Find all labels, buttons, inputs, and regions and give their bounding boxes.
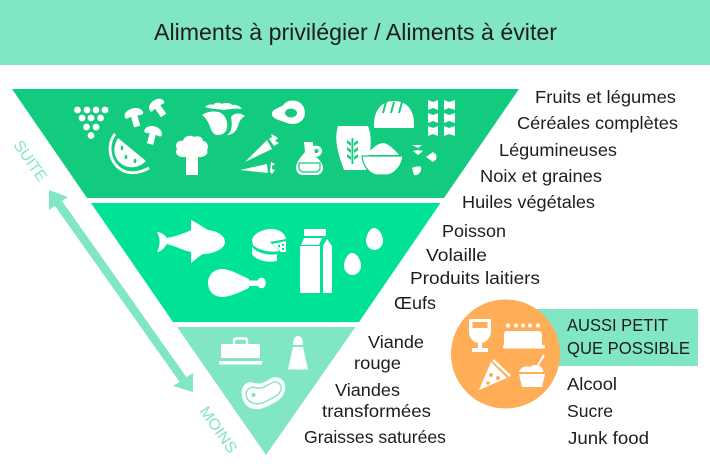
middle tier food list: Produits laitiers <box>410 268 540 288</box>
callout banner: as little as possible <box>500 309 698 366</box>
icon: oil jug <box>296 142 323 175</box>
callout banner: as little as possible: AUSSI PETIT <box>567 315 668 335</box>
top tier background <box>12 89 519 198</box>
icon: chicken leg <box>208 269 266 297</box>
icon: pasta bows <box>428 100 455 136</box>
icon: wine glass <box>469 319 491 352</box>
bottom tier food list <box>304 332 446 447</box>
icon: ice cream tub <box>519 355 545 387</box>
callout banner: as little as possible: QUE POSSIBLE <box>567 338 690 358</box>
top tier food list: Noix et graines <box>480 166 602 186</box>
top tier food list: Fruits et légumes <box>535 87 676 107</box>
icon: butter <box>219 338 262 364</box>
icon: milk carton <box>300 229 332 293</box>
arrow: double-headed scale <box>49 190 193 392</box>
bottom tier food list: Viandes <box>335 380 400 400</box>
top tier food list: Céréales complètes <box>517 113 678 133</box>
bottom tier food list: transformées <box>322 401 431 421</box>
orange circle of foods to avoid <box>451 300 560 408</box>
middle tier food list: Poisson <box>442 221 506 241</box>
label: SUITE: SUITE <box>10 138 50 185</box>
label: MOINS: MOINS <box>196 404 240 457</box>
callout food list: Alcool <box>567 374 617 394</box>
top tier food list <box>462 87 678 212</box>
title: Aliments à privilégier / Aliments à éviter <box>154 19 557 45</box>
callout food list: Sucre <box>567 401 613 421</box>
bottom tier food list: Graisses saturées <box>304 427 446 447</box>
icon: grain bag and bowl <box>336 126 403 175</box>
header banner <box>0 0 710 65</box>
middle tier food list <box>394 221 540 313</box>
panel: bottom tier of pyramid <box>177 327 356 455</box>
icon: beans <box>412 145 436 175</box>
middle tier background <box>91 203 440 322</box>
callout food list: Junk food <box>568 428 649 448</box>
bottom tier food list: rouge <box>354 353 401 373</box>
top tier food list: Légumineuses <box>499 140 617 160</box>
panel: middle tier of pyramid <box>91 203 440 322</box>
icon: steak <box>242 377 285 409</box>
top tier food list: Huiles végétales <box>462 192 595 212</box>
icon: grapes <box>74 107 108 139</box>
middle tier food list: Œufs <box>394 293 436 313</box>
icon: salt shaker <box>288 336 308 370</box>
bottom tier food list: Viande <box>368 332 424 352</box>
icon: watermelon <box>110 134 149 173</box>
callout food list <box>567 374 649 448</box>
icon: bread <box>374 101 414 128</box>
icon: broccoli <box>176 136 208 175</box>
panel: top tier of pyramid <box>12 89 519 198</box>
icon: fish <box>157 220 225 263</box>
icon: pizza slice <box>479 360 510 390</box>
middle tier food list: Volaille <box>426 245 487 265</box>
icon: cheese <box>252 229 286 262</box>
icon: eggs <box>344 228 383 275</box>
icon: lettuce <box>202 103 245 135</box>
icon: avocado <box>272 100 305 124</box>
icon: carrots <box>240 134 279 174</box>
icon: mushrooms <box>123 96 171 146</box>
icon: cake <box>503 324 545 348</box>
bottom tier background <box>177 327 356 455</box>
